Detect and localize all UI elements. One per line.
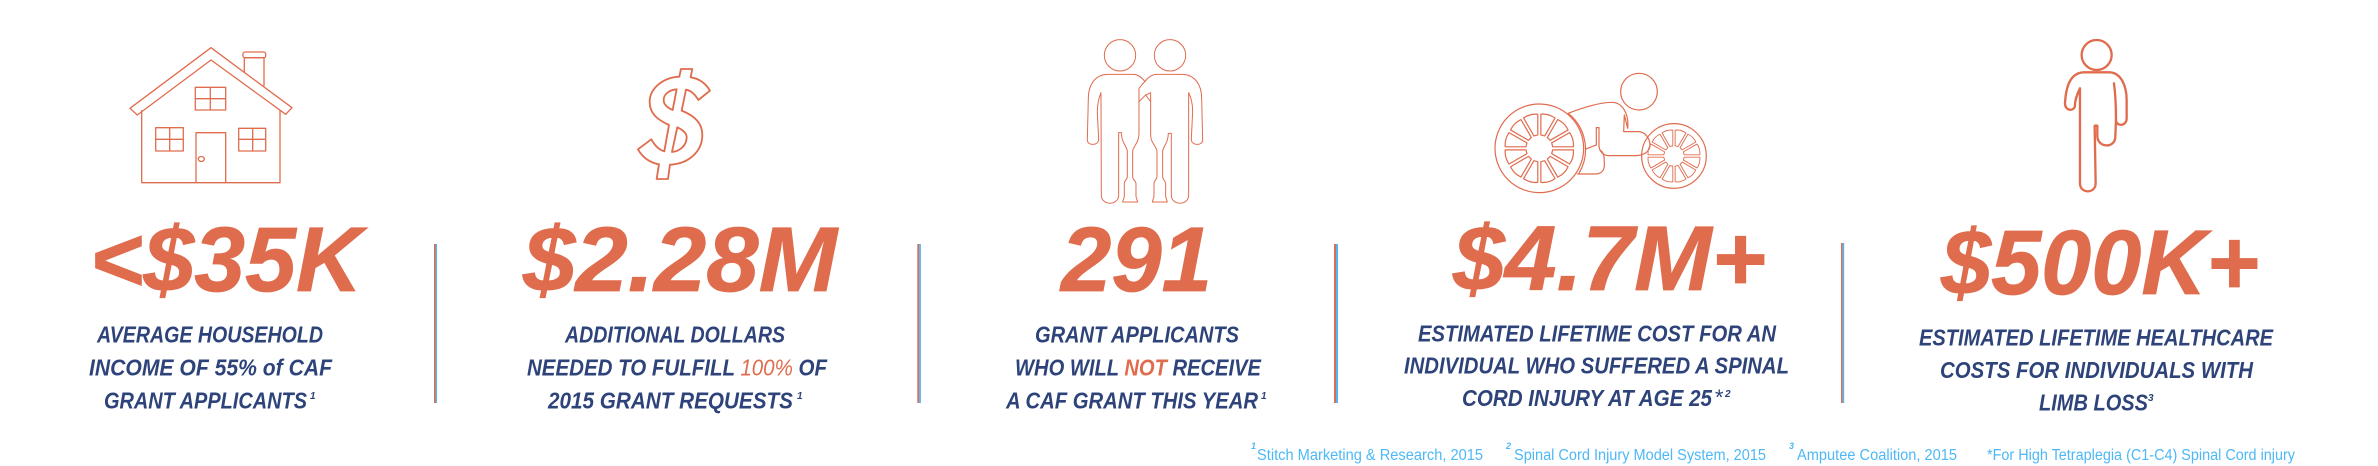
description: spinal cord injury cost: INDIVIDUAL WHO SUFFERED A SPINAL bbox=[1404, 352, 1789, 378]
description: spinal cord injury cost: * bbox=[1714, 385, 1724, 410]
description: limb loss cost: COSTS FOR INDIVIDUALS WITH bbox=[1940, 357, 2253, 383]
icon: house bbox=[130, 48, 292, 183]
description: limb loss cost bbox=[1919, 325, 2274, 416]
description: spinal cord injury cost: CORD INJURY AT AGE 25 bbox=[1462, 385, 1713, 411]
description: additional dollars: ADDITIONAL DOLLARS bbox=[564, 322, 786, 348]
description: limb loss cost: 3 bbox=[2148, 393, 2154, 404]
description: grant applicants: WHO WILL NOT RECEIVE bbox=[1015, 354, 1262, 380]
description: grant applicants: 1 bbox=[1261, 391, 1267, 402]
description: spinal cord injury cost: 2 bbox=[1724, 389, 1731, 400]
icon: two people bbox=[1087, 40, 1203, 203]
description: spinal cord injury cost bbox=[1404, 321, 1789, 411]
panel: additional dollars bbox=[522, 69, 839, 413]
footnotes: *For High Tetraplegia (C1-C4) Spinal Cord injury bbox=[1987, 447, 2295, 464]
panel: limb loss cost bbox=[1919, 40, 2274, 416]
statistic: 4.7M+: $4.7M+ bbox=[1452, 208, 1766, 310]
footnotes bbox=[1251, 441, 2295, 464]
description: household income bbox=[89, 322, 333, 413]
description: additional dollars: NEEDED TO FULFILL 100% OF bbox=[527, 354, 828, 380]
description: additional dollars: 1 bbox=[797, 391, 803, 402]
panel: spinal cord injury cost bbox=[1404, 73, 1789, 411]
description: household income: AVERAGE HOUSEHOLD bbox=[96, 322, 323, 348]
description: limb loss cost: ESTIMATED LIFETIME HEALTHCARE bbox=[1919, 325, 2274, 351]
statistic: 500K+: $500K+ bbox=[1940, 212, 2259, 314]
description: additional dollars bbox=[527, 322, 828, 413]
description: limb loss cost: LIMB LOSS bbox=[2039, 390, 2149, 416]
footnotes: 2 bbox=[1505, 441, 1511, 451]
footnotes: Stitch Marketing & Research, 2015 bbox=[1257, 447, 1483, 464]
statistic: 2.28M: $2.28M bbox=[522, 209, 839, 311]
description: grant applicants: A CAF GRANT THIS YEAR bbox=[1005, 387, 1258, 413]
description: grant applicants: GRANT APPLICANTS bbox=[1035, 322, 1240, 348]
description: household income: GRANT APPLICANTS bbox=[104, 387, 308, 413]
description: spinal cord injury cost: ESTIMATED LIFETIME COST FOR AN bbox=[1418, 321, 1776, 347]
footnotes: Amputee Coalition, 2015 bbox=[1797, 447, 1957, 464]
icon: person with limb loss bbox=[2065, 40, 2127, 191]
footnotes: 3 bbox=[1789, 441, 1794, 451]
icon: hand cycle rider bbox=[1495, 73, 1706, 193]
divider bbox=[917, 244, 921, 403]
icon: dollar sign bbox=[638, 69, 710, 179]
statistic: 291: 291 bbox=[1059, 209, 1212, 311]
divider bbox=[434, 244, 437, 403]
panel: household income bbox=[89, 48, 369, 413]
statistic: under 35K: <$35K bbox=[90, 209, 369, 311]
footnotes: Spinal Cord Injury Model System, 2015 bbox=[1514, 447, 1766, 464]
divider bbox=[1841, 243, 1844, 403]
description: household income: INCOME OF 55% of CAF bbox=[89, 354, 333, 380]
description: additional dollars: 2015 GRANT REQUESTS bbox=[547, 387, 794, 413]
description: grant applicants bbox=[1005, 322, 1267, 413]
description: household income: 1 bbox=[310, 391, 316, 402]
footnotes: 1 bbox=[1251, 441, 1256, 451]
divider bbox=[1334, 244, 1338, 403]
panel: grant applicants bbox=[1005, 40, 1267, 413]
